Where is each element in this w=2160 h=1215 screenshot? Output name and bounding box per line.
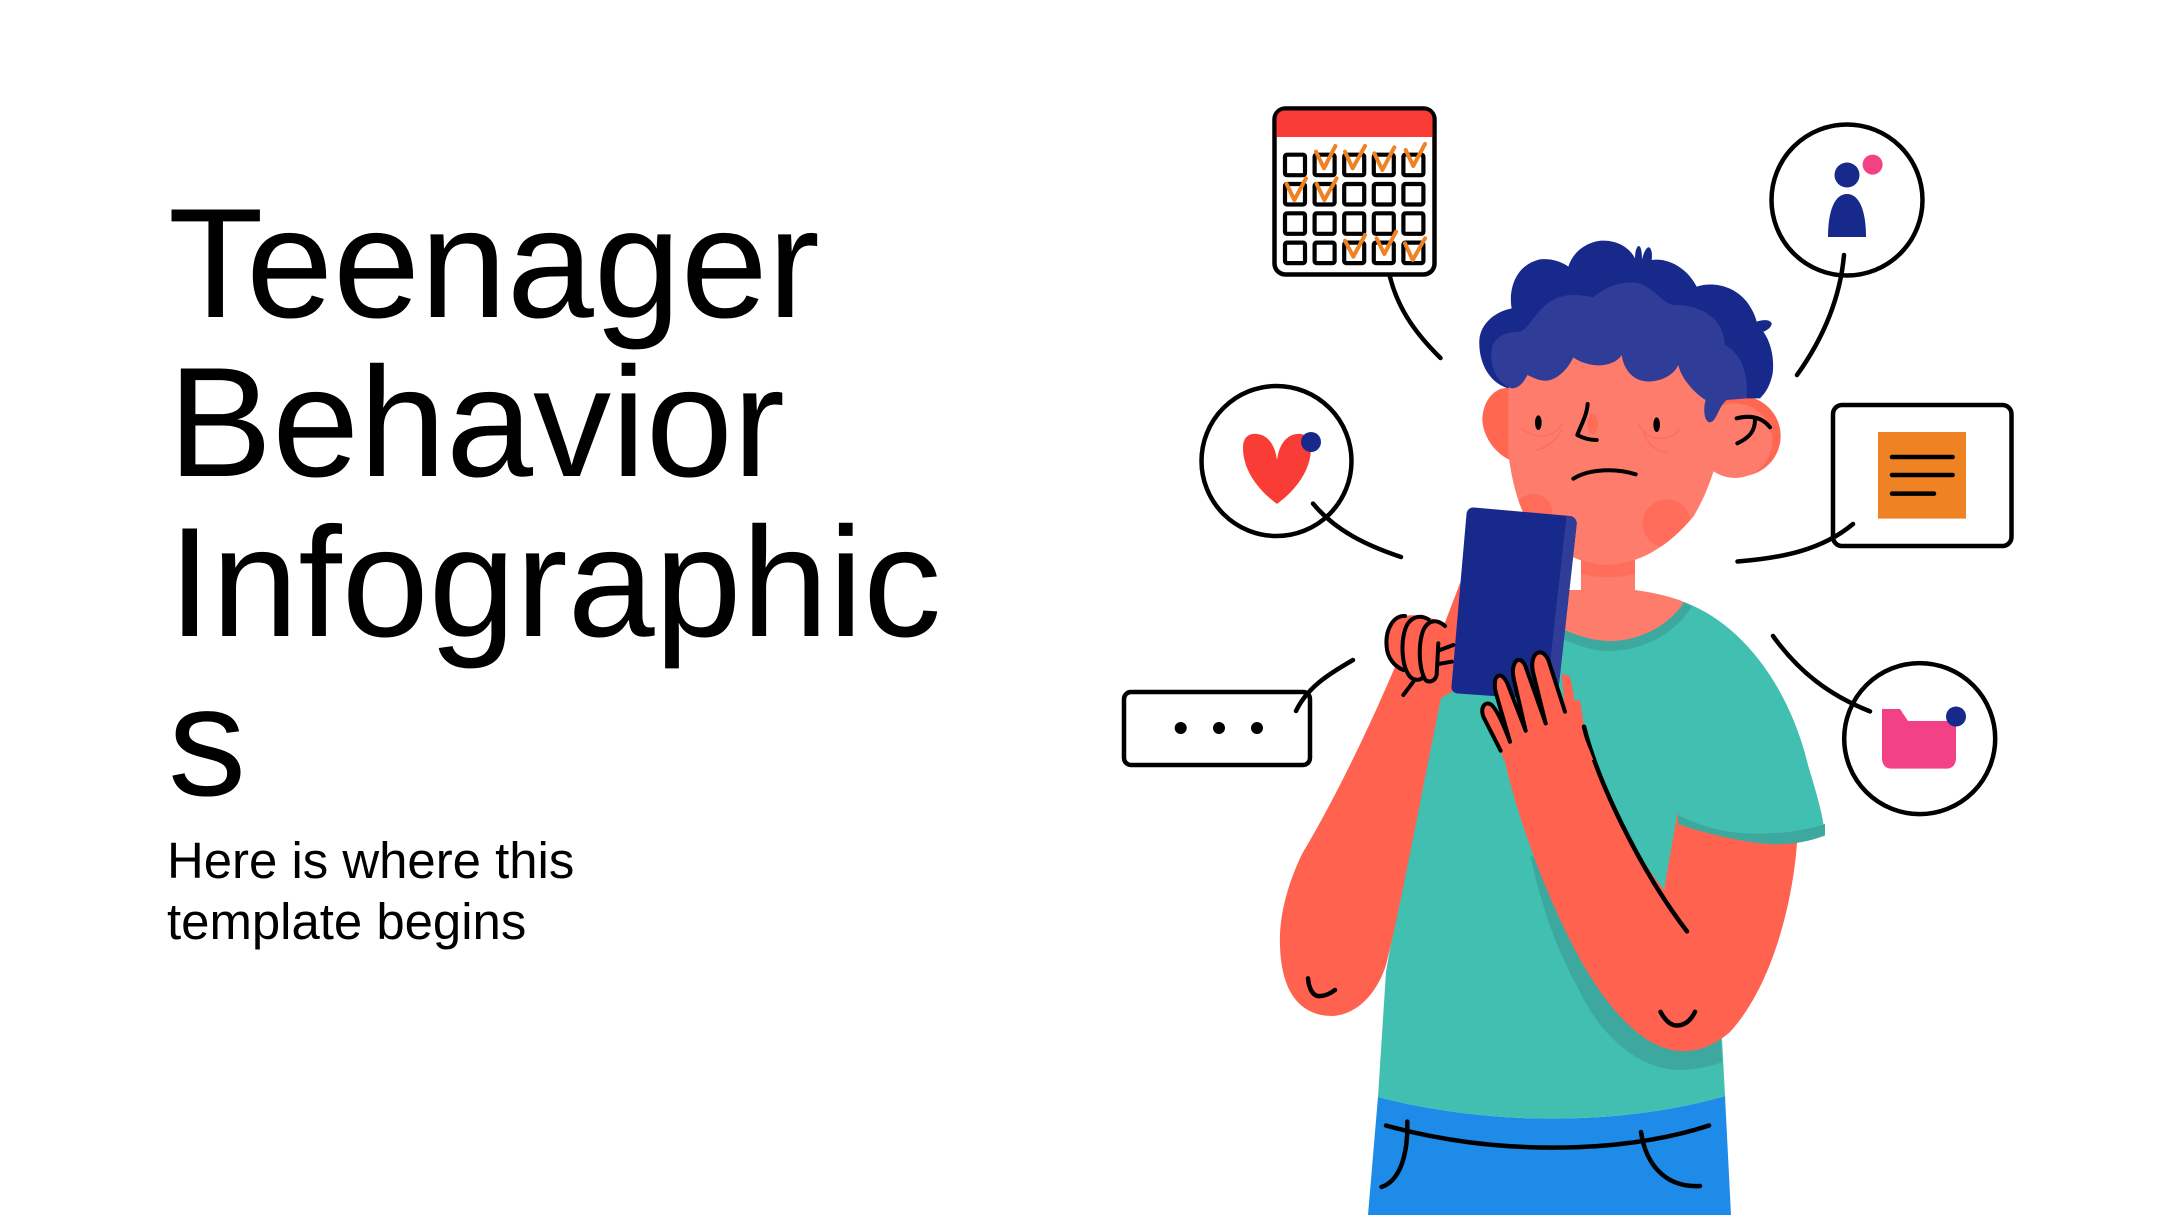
hair (1479, 241, 1773, 422)
pants (1368, 1096, 1731, 1215)
title: Teenager (168, 176, 820, 350)
icon: message bubble (1124, 660, 1353, 765)
icon: person bubble (1772, 124, 1922, 375)
title: s (168, 655, 246, 829)
icon: document bubble (1738, 405, 2012, 562)
title (168, 176, 941, 829)
icon: heart bubble (1202, 386, 1401, 557)
right arm (1500, 700, 1797, 1051)
icon: folder bubble (1773, 636, 1995, 814)
head (1479, 241, 1781, 565)
right hand (1482, 652, 1593, 760)
cheeks (1514, 414, 1691, 547)
calendar red header (1276, 110, 1432, 137)
title: Infographic (168, 496, 941, 670)
eyes, nose, mouth (1535, 404, 1770, 479)
calendar check marks (1287, 144, 1425, 260)
calendar frame (1274, 108, 1434, 274)
icon: calendar bubble (1274, 108, 1440, 358)
neck (1555, 555, 1684, 641)
left ear (1482, 388, 1512, 461)
phone (1451, 507, 1577, 700)
subtitle text: template begins (167, 893, 526, 950)
subtitle text (167, 832, 574, 950)
shirt (1378, 600, 1825, 1119)
shirt sleeve over arm (1678, 790, 1825, 844)
face (1508, 337, 1717, 565)
subtitle text: Here is where this (167, 832, 574, 889)
left hand fist (1386, 615, 1453, 695)
title: Behavior (168, 336, 785, 510)
right ear (1698, 396, 1781, 478)
wrinkles (1521, 423, 1679, 452)
illustration (1122, 106, 2014, 1215)
calendar grid (1285, 155, 1423, 263)
left arm (1280, 578, 1480, 1016)
teenager figure (1280, 241, 1825, 1215)
left elbow mark (1308, 978, 1335, 996)
